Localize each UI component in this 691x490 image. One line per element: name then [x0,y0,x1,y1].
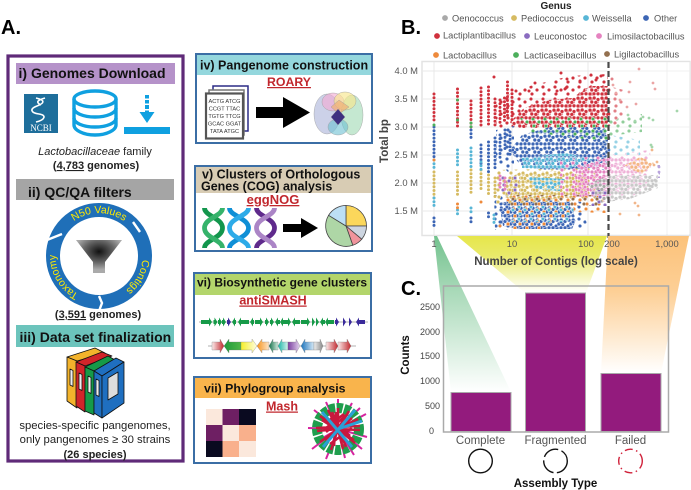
category labels: Failed [615,435,646,447]
heading: ii) QC/QA filters: ii) QC/QA filters [28,184,132,200]
bars [451,293,661,432]
legend: genus: Genus [540,1,572,12]
icon: download arrow [124,95,170,134]
category labels [456,435,646,447]
legend: genus: Other [654,14,677,24]
icon: sequence documents: TATA ATGC [210,129,239,135]
x axis ticks and title: 200 [604,238,620,249]
icon: DNA helices [204,208,274,248]
tool: Mash: Mash [266,400,298,414]
icon: filter cycle [46,203,152,309]
icon: filter cycle: N50 Values [70,206,126,221]
y axis ticks: 3.5 M [395,93,418,104]
icon: NCBI: NCBI [30,123,52,133]
heading: vii): vii) Phylogroup analysis [204,382,346,396]
text: data set summary: species-specific pangenomes, [19,420,171,432]
heading: iv): iv) Pangenome construction [200,58,368,72]
text: data set summary: only pangenomes ≥ 30 strains [20,434,171,446]
sparse outlier points [494,73,612,91]
y axis ticks: 1.5 M [395,205,418,216]
text: genome count: (4,783 genomes) [53,160,139,172]
legend: genus: Lacticaseibacillus [524,50,597,60]
x axis ticks and title [431,238,679,268]
heading: vii) [195,378,370,398]
icon: database [74,91,116,135]
category labels: Fragmented [524,435,587,447]
tool: eggNOG: eggNOG [247,192,299,207]
icon: sequence documents: ACTG ATCG [209,99,240,105]
heading: v) [196,167,371,194]
y axis ticks: 4.0 M [395,65,418,76]
panel A: genome selection [6,54,185,463]
heading: iii) Data set finalization [16,325,174,347]
icon: Venn diagram [314,92,363,135]
heading: iii) Data set finalization: iii) Data set finalization [20,329,171,345]
assembly circle icons [469,449,642,473]
y ticks: 1000 [420,376,440,386]
heading: ii) QC/QA filters [16,179,174,200]
y axis ticks: 3.0 M [395,121,418,132]
heading: iv) [197,55,371,75]
panel label B: B. [401,17,421,39]
legend: genus: Lactiplantibacillus [443,30,516,40]
y axis title: Total bp [379,119,391,163]
chart: phylogenetic tree [308,399,367,459]
icon: sequence documents: TGTG TTCG [208,114,241,120]
x axis ticks and title: 1 [431,238,437,249]
x axis ticks and title: Number of Contigs (log scale) [474,256,638,268]
panel iv: pangenome construction [196,54,372,143]
arrow [256,97,310,128]
icon: filter cycle: Contigs [126,260,150,294]
legend: genus: Weissella [592,14,632,24]
text: filtered genomes: (3,591 genomes) [55,309,141,321]
y axis ticks [395,65,418,216]
chart: COG pie [326,206,366,246]
icon: binders [67,348,124,418]
icon: NCBI [24,94,58,133]
tool: antiSMASH: antiSMASH [239,294,307,308]
legend: genus: Oenococcus [452,14,504,24]
text: data set summary [19,420,171,461]
scatter columns at low contig counts [434,82,512,228]
panel v: COG analysis [195,166,372,251]
heading: vi): vi) Biosynthetic gene clusters [197,276,367,290]
heading: vi) [195,274,370,295]
legend: genus: Leuconostoc [534,32,587,42]
panel label A: A. [1,17,21,39]
y axis ticks: 2.0 M [395,177,418,188]
y ticks: 2000 [420,327,440,337]
threshold line at 200 contigs [607,62,610,238]
text: genome count [38,146,152,172]
x title: Assembly Type [514,478,597,490]
chart: distance heatmap [206,409,256,457]
zoom wedges linking scatter to bars [434,236,689,392]
panel label C: C. [401,278,421,300]
icon: sequence documents: GCAC GGAT [208,122,242,128]
heading: v): Genes (COG) analysis [201,180,332,194]
text: genome count: Lactobacillaceae family [38,146,152,158]
y axis ticks: 2.5 M [395,149,418,160]
heading: v): v) Clusters of Orthologous [202,168,360,182]
panel vii: phylogroup analysis [194,377,371,463]
y ticks [420,302,440,436]
gene cluster track 1 [199,318,368,326]
y ticks: 0 [429,426,434,436]
legend: genus: Limosilactobacillus [607,32,685,42]
gene cluster track 2 [208,339,356,353]
scatter clouds [494,74,660,230]
tool: ROARY: ROARY [267,75,311,89]
x axis ticks and title: 100 [578,238,594,249]
arrow [283,218,318,238]
chart: assembly type bars [400,286,668,490]
chart: contigs vs genome size scatter [379,62,690,238]
icon: sequence documents: CCGT TTAC [209,106,240,112]
y ticks: 2500 [420,302,440,312]
y ticks: 1500 [420,351,440,361]
legend: genus: Ligilactobacillus [614,50,679,60]
x axis ticks and title: 1,000 [655,238,679,249]
legend: genus: Pediococcus [521,14,574,24]
heading: i) Genomes Download: i) Genomes Download [18,65,166,81]
fade overlay beyond threshold [610,62,690,234]
icon: sequence documents [206,86,248,138]
legend: genus [433,1,685,60]
category labels: Complete [456,435,505,447]
icon: filter cycle: Taxonomy [50,255,76,300]
y title: Counts [400,335,412,375]
text: data set summary: (26 species) [64,449,127,461]
legend: genus: Lactobacillus [443,50,497,60]
x axis ticks and title: 10 [507,238,517,249]
panel vi: biosynthetic gene clusters [194,273,371,358]
y ticks: 500 [425,401,440,411]
